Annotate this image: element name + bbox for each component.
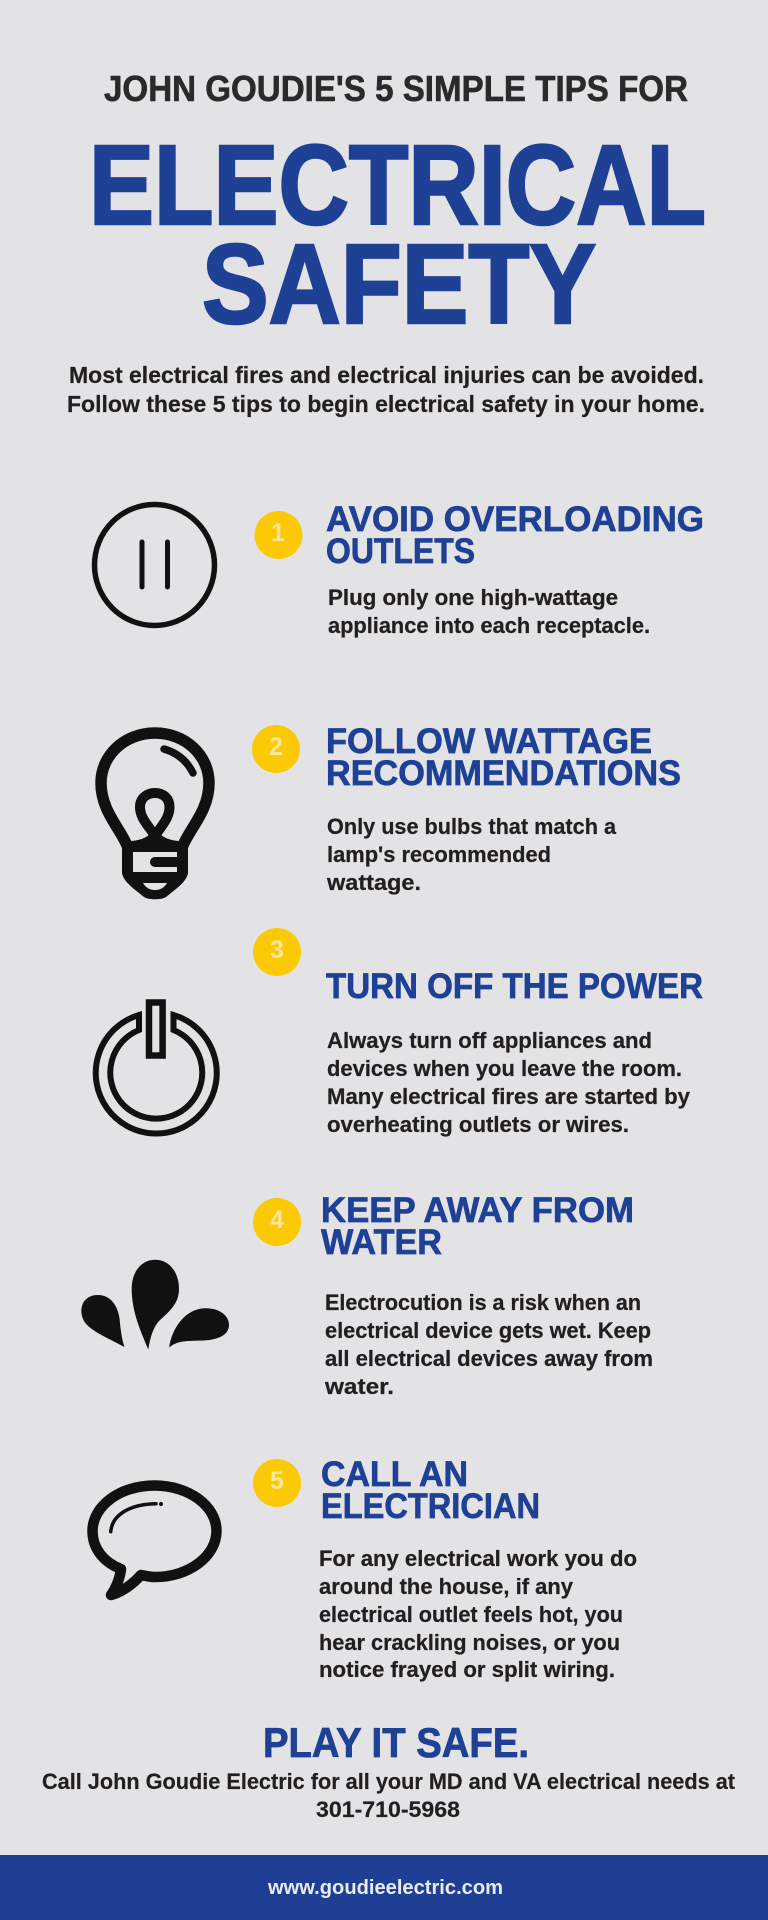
intro text <box>67 362 705 417</box>
number badge 4 <box>253 1198 301 1246</box>
tip 2 text: Only use bulbs that match a <box>327 814 617 839</box>
tip 5 text: hear crackling noises, or you <box>319 1630 620 1655</box>
tip 5 text: notice frayed or split wiring. <box>319 1657 615 1682</box>
intro text: Most electrical fires and electrical injuries can be avoided. <box>69 362 704 388</box>
tip 4 text: all electrical devices away from <box>325 1346 653 1371</box>
heading: Electrical Safety <box>89 122 706 347</box>
number badge 4: 4 <box>270 1206 284 1234</box>
tip 4 heading <box>321 1191 634 1262</box>
tip 3 text <box>327 1028 691 1137</box>
panel: tip 3 <box>96 928 703 1137</box>
icon: outlet <box>94 504 214 626</box>
number badge 5 <box>253 1459 301 1507</box>
tip 3 text: Many electrical fires are started by <box>327 1084 691 1109</box>
tip 5 heading: ELECTRICIAN <box>321 1487 540 1526</box>
footer band <box>0 1855 768 1920</box>
intro text: Follow these 5 tips to begin electrical safety in your home. <box>67 391 705 417</box>
tip 2 text: wattage. <box>326 870 421 895</box>
tip 1 heading: OUTLETS <box>326 532 475 571</box>
tip 1 text: appliance into each receptacle. <box>328 613 650 638</box>
tip 4 text: water. <box>324 1374 394 1399</box>
number badge 1 <box>254 511 302 559</box>
number badge 2: 2 <box>269 733 283 761</box>
tip 5 text: For any electrical work you do <box>319 1546 637 1571</box>
tip 4 text: electrical device gets wet. Keep <box>325 1318 651 1343</box>
tip 4 heading: WATER <box>321 1223 442 1262</box>
number badge 3 <box>253 928 301 976</box>
heading: Play it safe: PLAY IT SAFE. <box>263 1719 529 1766</box>
tip 5 text <box>319 1546 637 1682</box>
website url: www.goudieelectric.com <box>267 1877 503 1899</box>
tip 2 text <box>326 814 617 895</box>
tip 3 text: overheating outlets or wires. <box>327 1112 629 1137</box>
icon: water splash <box>81 1260 229 1350</box>
title: John Goudie's 5 simple tips for: JOHN GOUDIE'S 5 SIMPLE TIPS FOR <box>104 68 688 109</box>
panel: tip 5 <box>92 1455 637 1682</box>
call to action text: Call John Goudie Electric for all your MD and VA electrical needs at <box>42 1769 736 1794</box>
tip 3 heading: TURN OFF THE POWER <box>326 967 703 1006</box>
number badge 3: 3 <box>270 936 284 964</box>
tip 3 text: devices when you leave the room. <box>327 1056 682 1081</box>
tip 1 text: Plug only one high-wattage <box>328 585 618 610</box>
number badge 5: 5 <box>270 1467 284 1495</box>
tip 2 heading <box>326 722 681 793</box>
icon: power button <box>96 1002 217 1133</box>
tip 5 heading: CALL AN <box>321 1455 468 1494</box>
icon: speech bubble <box>92 1486 216 1595</box>
tip 1 text <box>328 585 650 638</box>
tip 4 text <box>324 1290 653 1399</box>
tip 2 text: lamp's recommended <box>327 842 551 867</box>
tip 2 heading: RECOMMENDATIONS <box>326 754 681 793</box>
call to action text: 301-710-5968 <box>316 1797 460 1822</box>
tip 5 text: electrical outlet feels hot, you <box>319 1602 623 1627</box>
tip 2 heading: FOLLOW WATTAGE <box>326 722 652 761</box>
panel: tip 1 <box>94 500 704 638</box>
heading: Electrical Safety: SAFETY <box>202 221 596 347</box>
number badge 1: 1 <box>271 519 285 547</box>
tip 5 text: around the house, if any <box>319 1574 574 1599</box>
tip 5 heading <box>321 1455 540 1526</box>
tip 1 heading <box>326 500 704 571</box>
tip 4 text: Electrocution is a risk when an <box>325 1290 641 1315</box>
icon: light bulb <box>101 733 209 899</box>
call to action text <box>42 1769 736 1822</box>
tip 4 heading: KEEP AWAY FROM <box>321 1191 634 1230</box>
tip 3 text: Always turn off appliances and <box>327 1028 652 1053</box>
number badge 2 <box>252 725 300 773</box>
panel: tip 4 <box>81 1191 653 1399</box>
panel: tip 2 <box>101 722 681 899</box>
tip 1 heading: AVOID OVERLOADING <box>326 500 704 539</box>
